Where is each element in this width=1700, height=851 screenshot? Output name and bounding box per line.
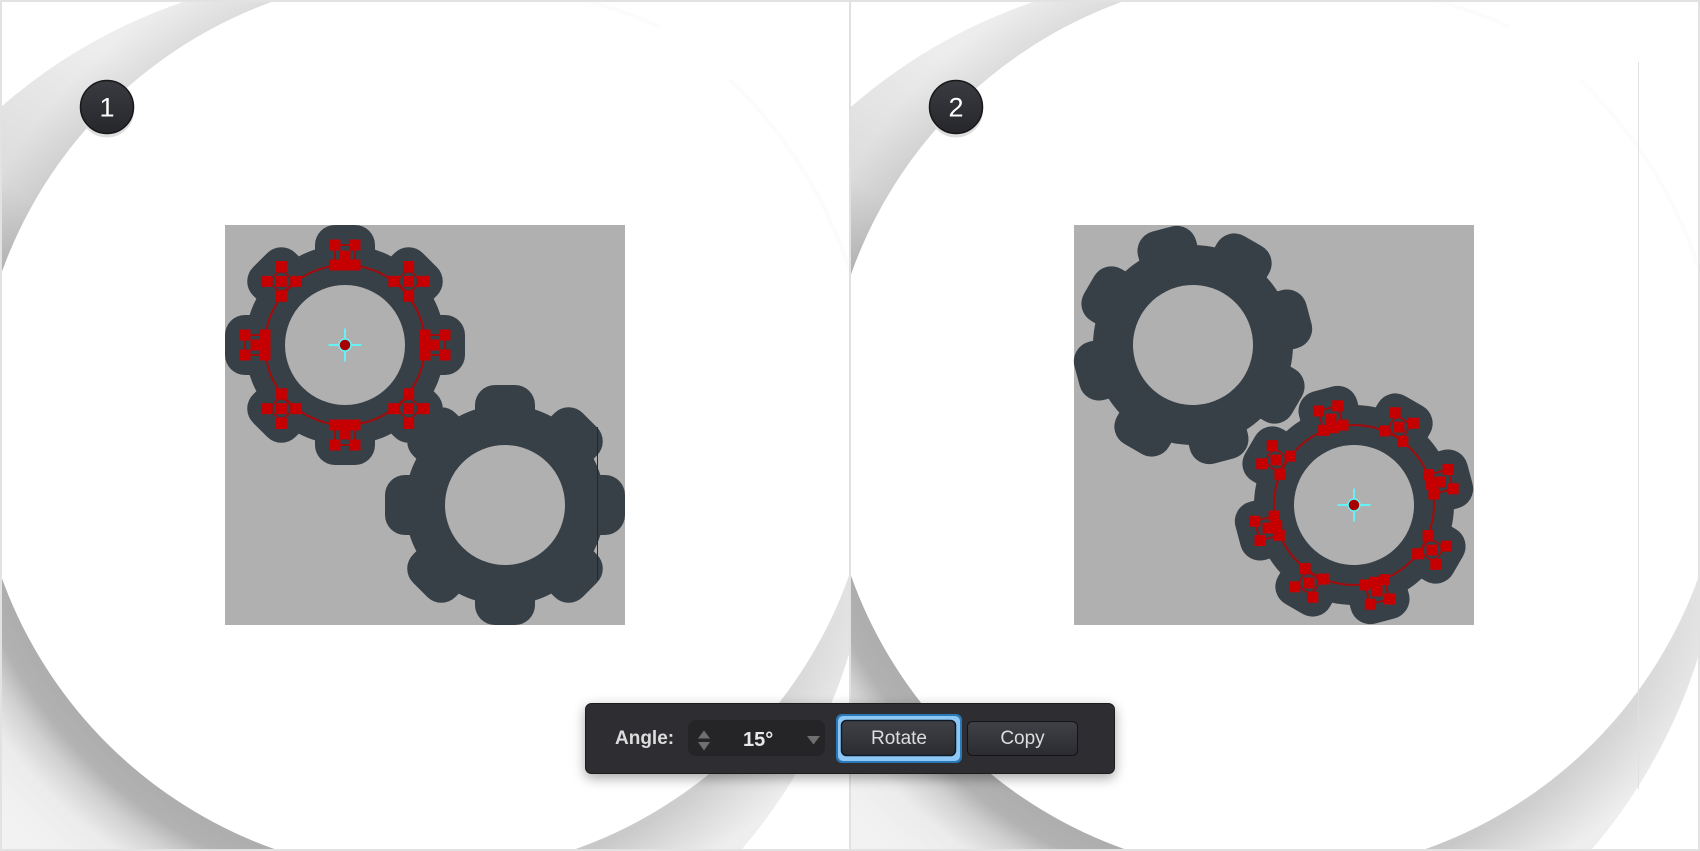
button: Copy: Copy — [1000, 728, 1045, 749]
icon: stepper arrows — [698, 730, 710, 750]
label: Angle: Angle: — [615, 728, 674, 749]
guide line in panel 2 — [1638, 62, 1639, 789]
selected gear shape — [225, 225, 465, 465]
panel 2: gears artwork rotated 15 degrees — [1046, 198, 1501, 652]
badge: step 2 — [929, 80, 983, 138]
panel divider — [849, 0, 851, 851]
selection path anchors on gear 2 — [1247, 398, 1461, 612]
rotate dialog toolbar — [586, 704, 1114, 774]
rotated selected gear shape — [1207, 358, 1501, 652]
badge: step 1 — [80, 80, 134, 138]
rotated first gear shape — [1046, 198, 1340, 492]
panel 1: gears artwork — [225, 225, 625, 625]
second gear shape — [385, 385, 625, 625]
grey artboard square — [225, 225, 625, 625]
button: Copy — [968, 722, 1078, 756]
grey artboard square — [1074, 225, 1474, 625]
panel 2 background circle and shadows — [825, 0, 1700, 851]
icon: dropdown arrow — [807, 736, 820, 744]
toolbar panel — [586, 704, 1114, 774]
button: Rotate (focused): Rotate — [871, 728, 927, 749]
button: Rotate (focused) — [836, 714, 962, 763]
badge: step 2: 2 — [948, 92, 964, 122]
vertical artifact line on second gear — [597, 427, 598, 580]
panel 1 background circle and shadows — [0, 0, 875, 851]
angle input field — [688, 720, 825, 756]
angle value: 15° — [743, 729, 773, 751]
badge: step 1: 1 — [99, 92, 115, 122]
selection path anchors on gear 1 — [240, 240, 450, 450]
